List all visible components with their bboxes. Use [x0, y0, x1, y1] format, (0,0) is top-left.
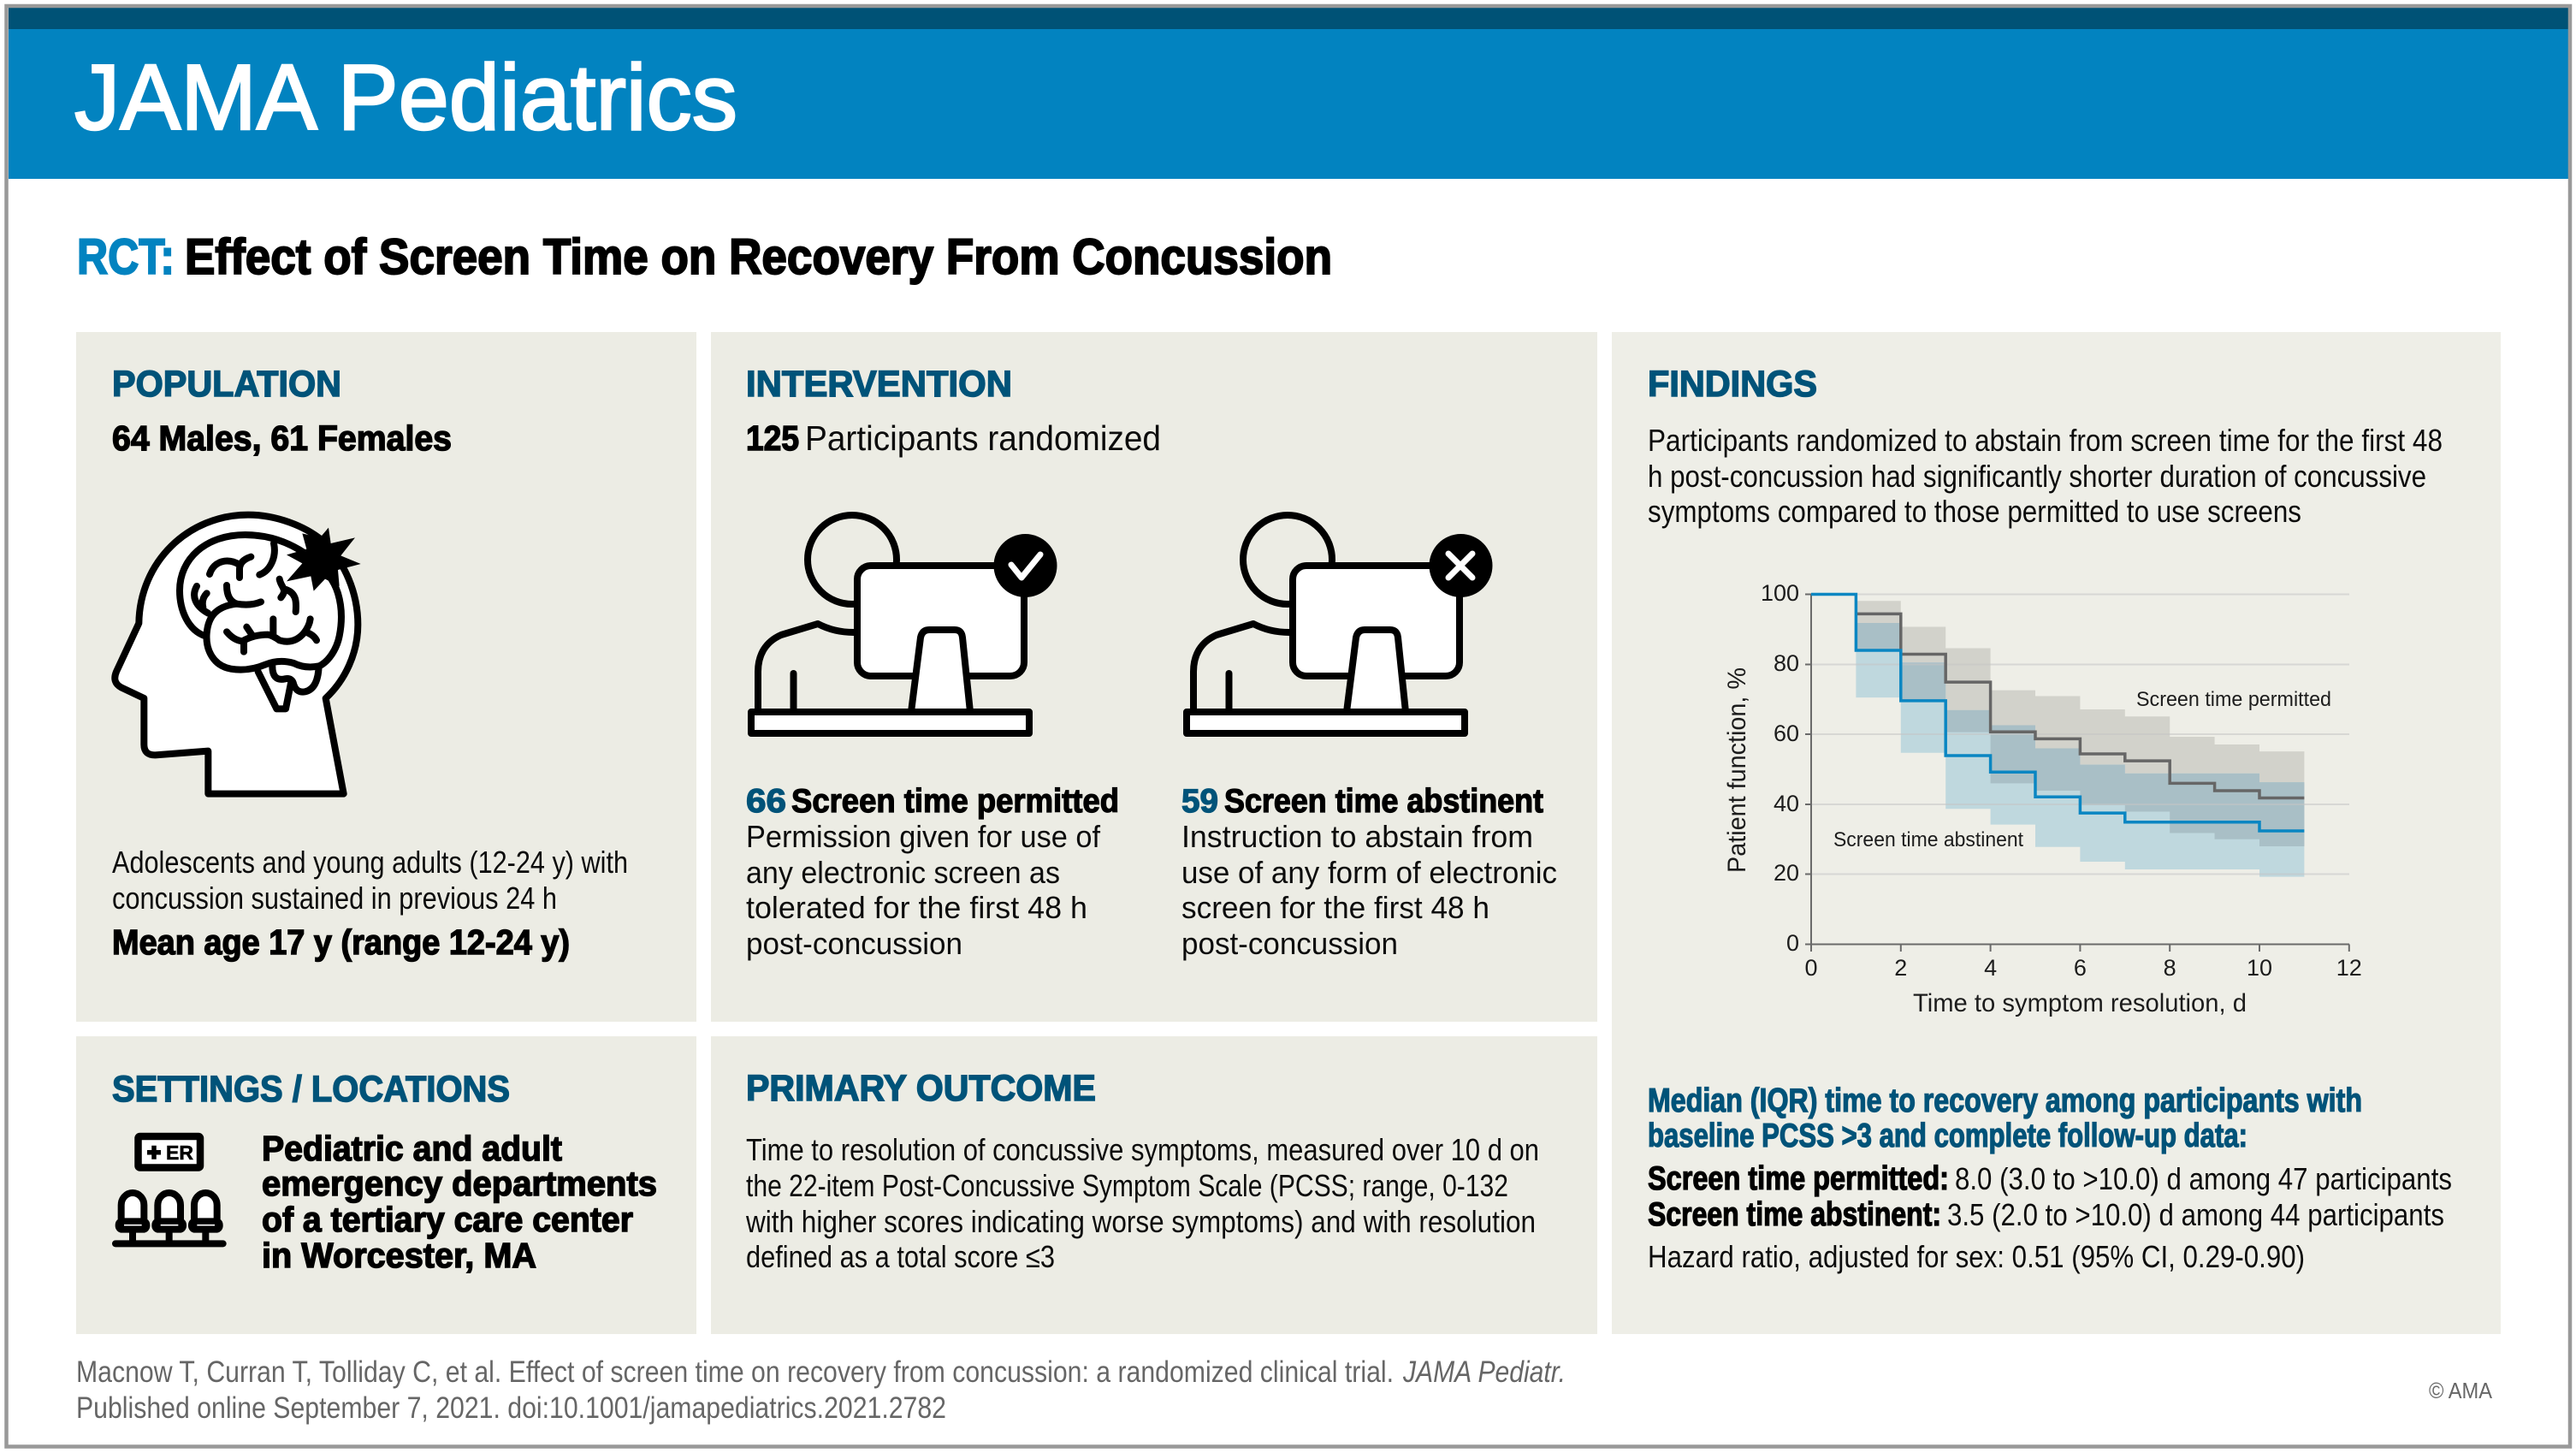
settings description: of a tertiary care center — [262, 1200, 633, 1239]
icon: person at screen, abstinent — [1187, 515, 1492, 733]
findings summary — [1648, 423, 2443, 529]
arm: screen time abstinent: Instruction to abstain from — [1181, 819, 1533, 854]
median results — [1648, 1160, 2452, 1233]
curve: screen time permitted — [1856, 614, 2304, 798]
hazard ratio: Hazard ratio, adjusted for sex: 0.51 (95% CI, 0.29-0.90) — [1648, 1239, 2305, 1274]
settings description — [262, 1129, 657, 1275]
x axis labels — [1804, 955, 2362, 981]
citation: Macnow T, Curran T, Tolliday C, et al. Effect of screen time on recovery from concussion: a randomized clinical trial. — [76, 1355, 1394, 1389]
y axis labels: 20 — [1774, 860, 1799, 886]
y axis labels: 100 — [1761, 580, 1799, 606]
x axis labels: 6 — [2074, 955, 2087, 981]
panel: intervention — [711, 332, 1597, 1022]
heading: settings: SETTINGS / LOCATIONS — [112, 1069, 510, 1110]
y axis labels: 80 — [1774, 650, 1799, 676]
findings summary: symptoms compared to those permitted to use screens — [1648, 494, 2301, 529]
title: Effect of Screen Time on Recovery From Concussion — [185, 229, 1332, 285]
arm: screen time permitted: tolerated for the first 48 h — [746, 890, 1087, 925]
outcome description — [745, 1132, 1539, 1274]
y axis title: Patient function, % — [1723, 667, 1751, 873]
arm: screen time abstinent: post-concussion — [1181, 926, 1398, 961]
y axis labels: 40 — [1774, 791, 1799, 816]
panel: primary outcome — [711, 1036, 1597, 1334]
icon: head with brain and impact star — [115, 515, 361, 794]
arm: screen time permitted: 66 — [746, 783, 786, 820]
citation — [76, 1355, 1566, 1425]
journal name: JAMA Pediatrics — [74, 45, 737, 150]
arm: screen time abstinent: Screen time abstinent — [1224, 783, 1543, 820]
sex counts: 64 Males, 61 Females — [112, 418, 452, 458]
curve label: permitted: Screen time permitted — [2136, 688, 2331, 711]
median results: Screen time abstinent: — [1648, 1196, 1941, 1233]
mean age: Mean age 17 y (range 12-24 y) — [112, 922, 570, 962]
axes — [1805, 594, 2349, 952]
panel: population — [76, 332, 696, 1022]
y axis labels: 0 — [1786, 930, 1799, 956]
heading: intervention: INTERVENTION — [746, 364, 1012, 405]
panel: settings and locations — [76, 1036, 696, 1334]
outcome description: defined as a total score ≤3 — [746, 1239, 1055, 1274]
outcome description: with higher scores indicating worse symptoms) and with resolution — [745, 1204, 1536, 1239]
x axis labels: 4 — [1984, 955, 1997, 981]
x axis labels: 2 — [1894, 955, 1907, 981]
citation: JAMA Pediatr. — [1402, 1355, 1566, 1389]
heading: population: POPULATION — [112, 364, 341, 405]
settings description: emergency departments — [262, 1164, 657, 1203]
median time subheading: Median (IQR) time to recovery among participants with — [1648, 1082, 2362, 1119]
x axis title: Time to symptom resolution, d — [1913, 989, 2247, 1017]
title: RCT: — [77, 229, 175, 285]
randomized count: 125 — [746, 418, 799, 458]
curve label: abstinent: Screen time abstinent — [1833, 828, 2023, 851]
copyright: © AMA — [2429, 1378, 2493, 1403]
header band — [9, 8, 2568, 179]
arm: screen time abstinent — [1181, 783, 1557, 961]
findings summary: Participants randomized to abstain from screen time for the first 48 — [1648, 423, 2443, 458]
outcome description: Time to resolution of concussive symptoms, measured over 10 d on — [746, 1132, 1539, 1167]
arm: screen time permitted: any electronic screen as — [746, 855, 1060, 890]
population description: Adolescents and young adults (12-24 y) with — [112, 845, 628, 880]
arm: screen time permitted: Permission given for use of — [746, 819, 1101, 854]
curve: screen time abstinent — [1811, 594, 2304, 831]
citation: Published online September 7, 2021. doi:10.1001/jamapediatrics.2021.2782 — [76, 1391, 946, 1425]
median time subheading — [1648, 1082, 2362, 1154]
x axis labels: 10 — [2247, 955, 2272, 981]
randomized count: Participants randomized — [805, 418, 1161, 458]
x axis labels: 12 — [2336, 955, 2362, 981]
arm: screen time permitted: post-concussion — [746, 926, 962, 961]
icon: ER sign and waiting chairs: ER — [166, 1142, 193, 1164]
x axis labels: 0 — [1804, 955, 1818, 981]
heading: primary outcome: PRIMARY OUTCOME — [746, 1068, 1096, 1109]
median time subheading: baseline PCSS >3 and complete follow-up data: — [1648, 1118, 2247, 1154]
findings summary: h post-concussion had significantly shorter duration of concussive — [1648, 459, 2426, 494]
median results: Screen time permitted: — [1648, 1160, 1949, 1197]
arm: screen time permitted: Screen time permitted — [791, 783, 1119, 820]
population description: concussion sustained in previous 24 h — [112, 881, 557, 916]
arm: screen time abstinent: 59 — [1181, 783, 1218, 820]
median results: 8.0 (3.0 to >10.0) d among 47 participants — [1955, 1161, 2452, 1196]
outcome description: the 22-item Post-Concussive Symptom Scale (PCSS; range, 0-132 — [746, 1168, 1508, 1203]
icon: person at screen, permitted — [751, 515, 1057, 733]
x axis labels: 8 — [2164, 955, 2176, 981]
settings description: Pediatric and adult — [262, 1129, 562, 1168]
heading: findings: FINDINGS — [1648, 364, 1817, 405]
population description — [112, 845, 628, 916]
arm: screen time abstinent: screen for the first 48 h — [1181, 890, 1489, 925]
confidence bands — [1856, 601, 2304, 877]
y axis labels: 60 — [1774, 721, 1799, 746]
y axis labels — [1761, 580, 1799, 956]
arm: screen time permitted — [746, 783, 1119, 961]
chart: Kaplan-Meier recovery curves — [1723, 580, 2362, 1017]
settings description: in Worcester, MA — [262, 1236, 536, 1275]
median results: 3.5 (2.0 to >10.0) d among 44 participants — [1947, 1197, 2444, 1232]
panel: findings — [1612, 332, 2501, 1334]
icon: ER sign and waiting chairs — [115, 1136, 223, 1243]
arm: screen time abstinent: use of any form of electronic — [1181, 855, 1557, 890]
